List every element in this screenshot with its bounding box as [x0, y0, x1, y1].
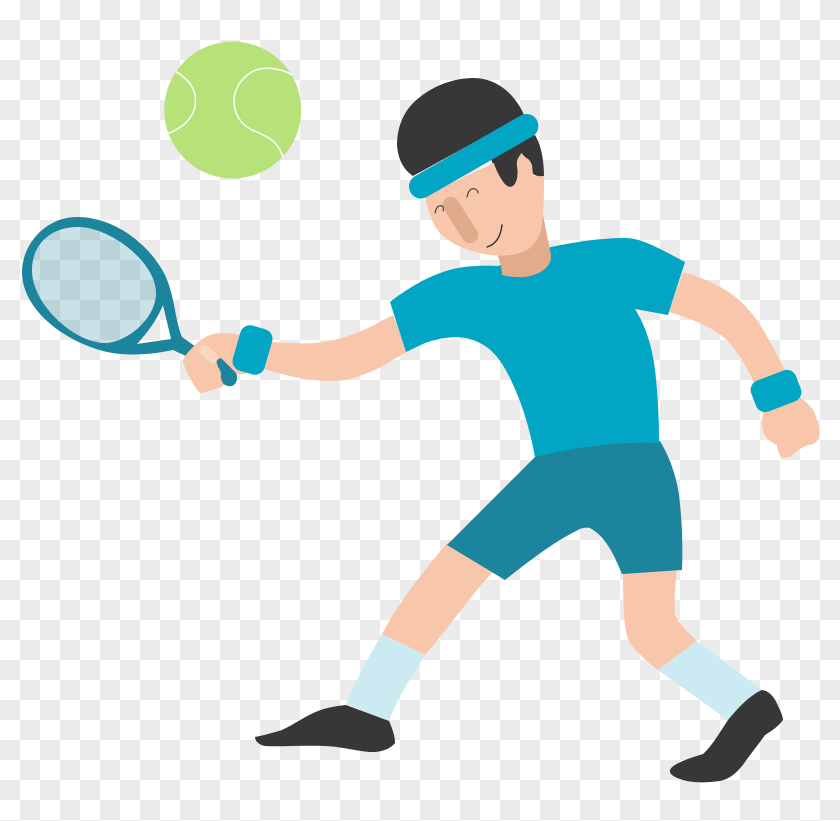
left arm: [262, 315, 407, 381]
t-shirt: [390, 238, 685, 457]
left hand gripping racket: [183, 333, 246, 393]
shorts: [447, 441, 682, 580]
right wristband: [748, 367, 804, 415]
right hand fist: [762, 397, 819, 458]
palm: [183, 333, 246, 393]
racket butt: [216, 358, 237, 386]
nose: [451, 205, 470, 235]
head: [397, 78, 544, 256]
icon: tennis racket: [22, 217, 199, 358]
left leg with sock and shoe: [255, 540, 500, 752]
racket frame: [22, 217, 199, 358]
cap: [397, 78, 524, 176]
thigh: [623, 568, 697, 670]
thumb highlight: [204, 350, 213, 358]
left wristband: [230, 323, 275, 377]
racket strings: [32, 227, 156, 343]
sock: [658, 641, 762, 720]
thigh: [382, 540, 500, 655]
hair behind band: [490, 135, 544, 187]
shoe: [255, 705, 395, 752]
headband: [421, 126, 526, 186]
eyes: [435, 189, 478, 213]
fingers: [192, 361, 223, 392]
smile: [487, 225, 502, 247]
face: [425, 150, 544, 256]
hair lock on face: [493, 148, 525, 187]
sock: [346, 634, 425, 721]
right leg with sock and shoe: [623, 568, 783, 782]
shoe: [670, 690, 783, 782]
neck: [498, 215, 551, 277]
right arm: [669, 272, 787, 384]
icon: tennis ball: [164, 42, 301, 178]
